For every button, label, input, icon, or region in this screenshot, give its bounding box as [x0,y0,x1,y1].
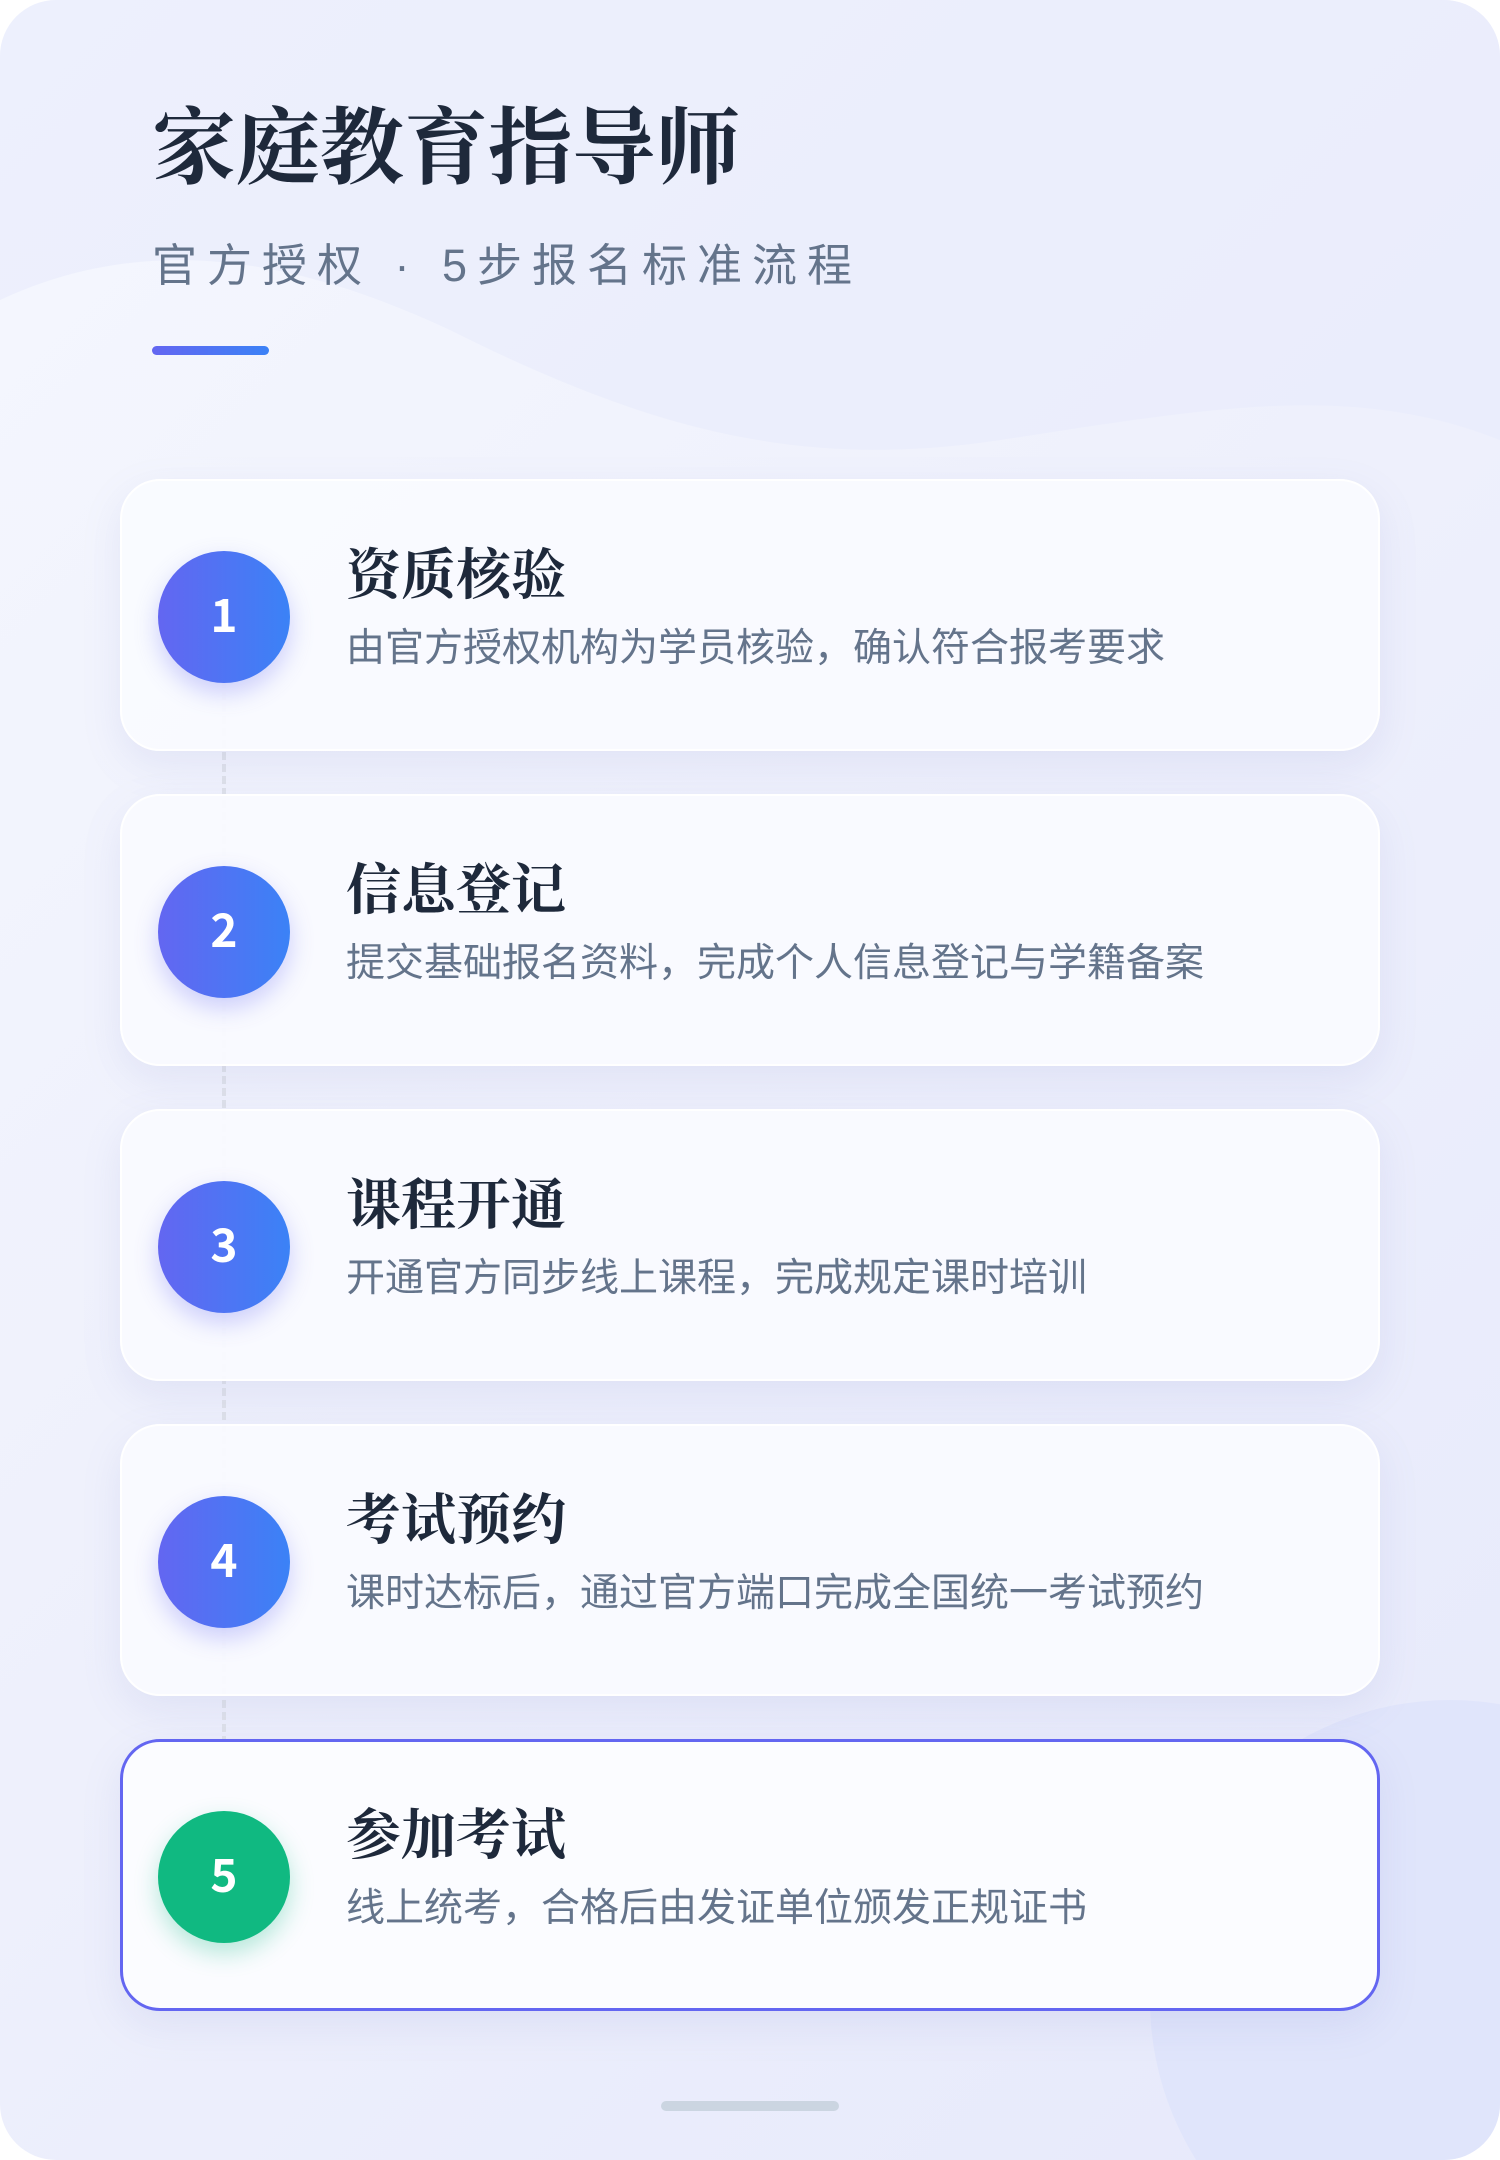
dashed connector [222,680,226,1780]
step 2: 2 [210,895,238,961]
step 1 [120,479,1380,751]
subtitle: 官方授权 · 5步报名标准流程 [152,240,862,291]
step 2 [120,794,1380,1066]
step 4 [120,1424,1380,1696]
step 5: 5 [210,1840,238,1906]
step 3: 课程开通 [346,1175,566,1236]
step 4: 考试预约 [346,1490,566,1551]
step 3: 3 [210,1210,238,1276]
title: 家庭教育指导师 [152,103,740,196]
step 1: 资质核验 [346,545,566,606]
step 5 [120,1739,1380,2011]
step 1: 1 [210,580,238,646]
step 3: 开通官方同步线上课程，完成规定课时培训 [346,1257,1087,1300]
bottom bar [661,2101,839,2111]
step 3 [120,1109,1380,1381]
step 5: 参加考试 [346,1805,566,1866]
step 4: 课时达标后，通过官方端口完成全国统一考试预约 [346,1572,1204,1615]
step 2: 信息登记 [346,860,566,921]
step 4: 4 [210,1525,238,1591]
step 5: 线上统考，合格后由发证单位颁发正规证书 [346,1887,1087,1930]
accent bar [152,346,269,355]
step 2: 提交基础报名资料，完成个人信息登记与学籍备案 [346,942,1204,985]
step 1: 由官方授权机构为学员核验，确认符合报考要求 [346,627,1165,670]
